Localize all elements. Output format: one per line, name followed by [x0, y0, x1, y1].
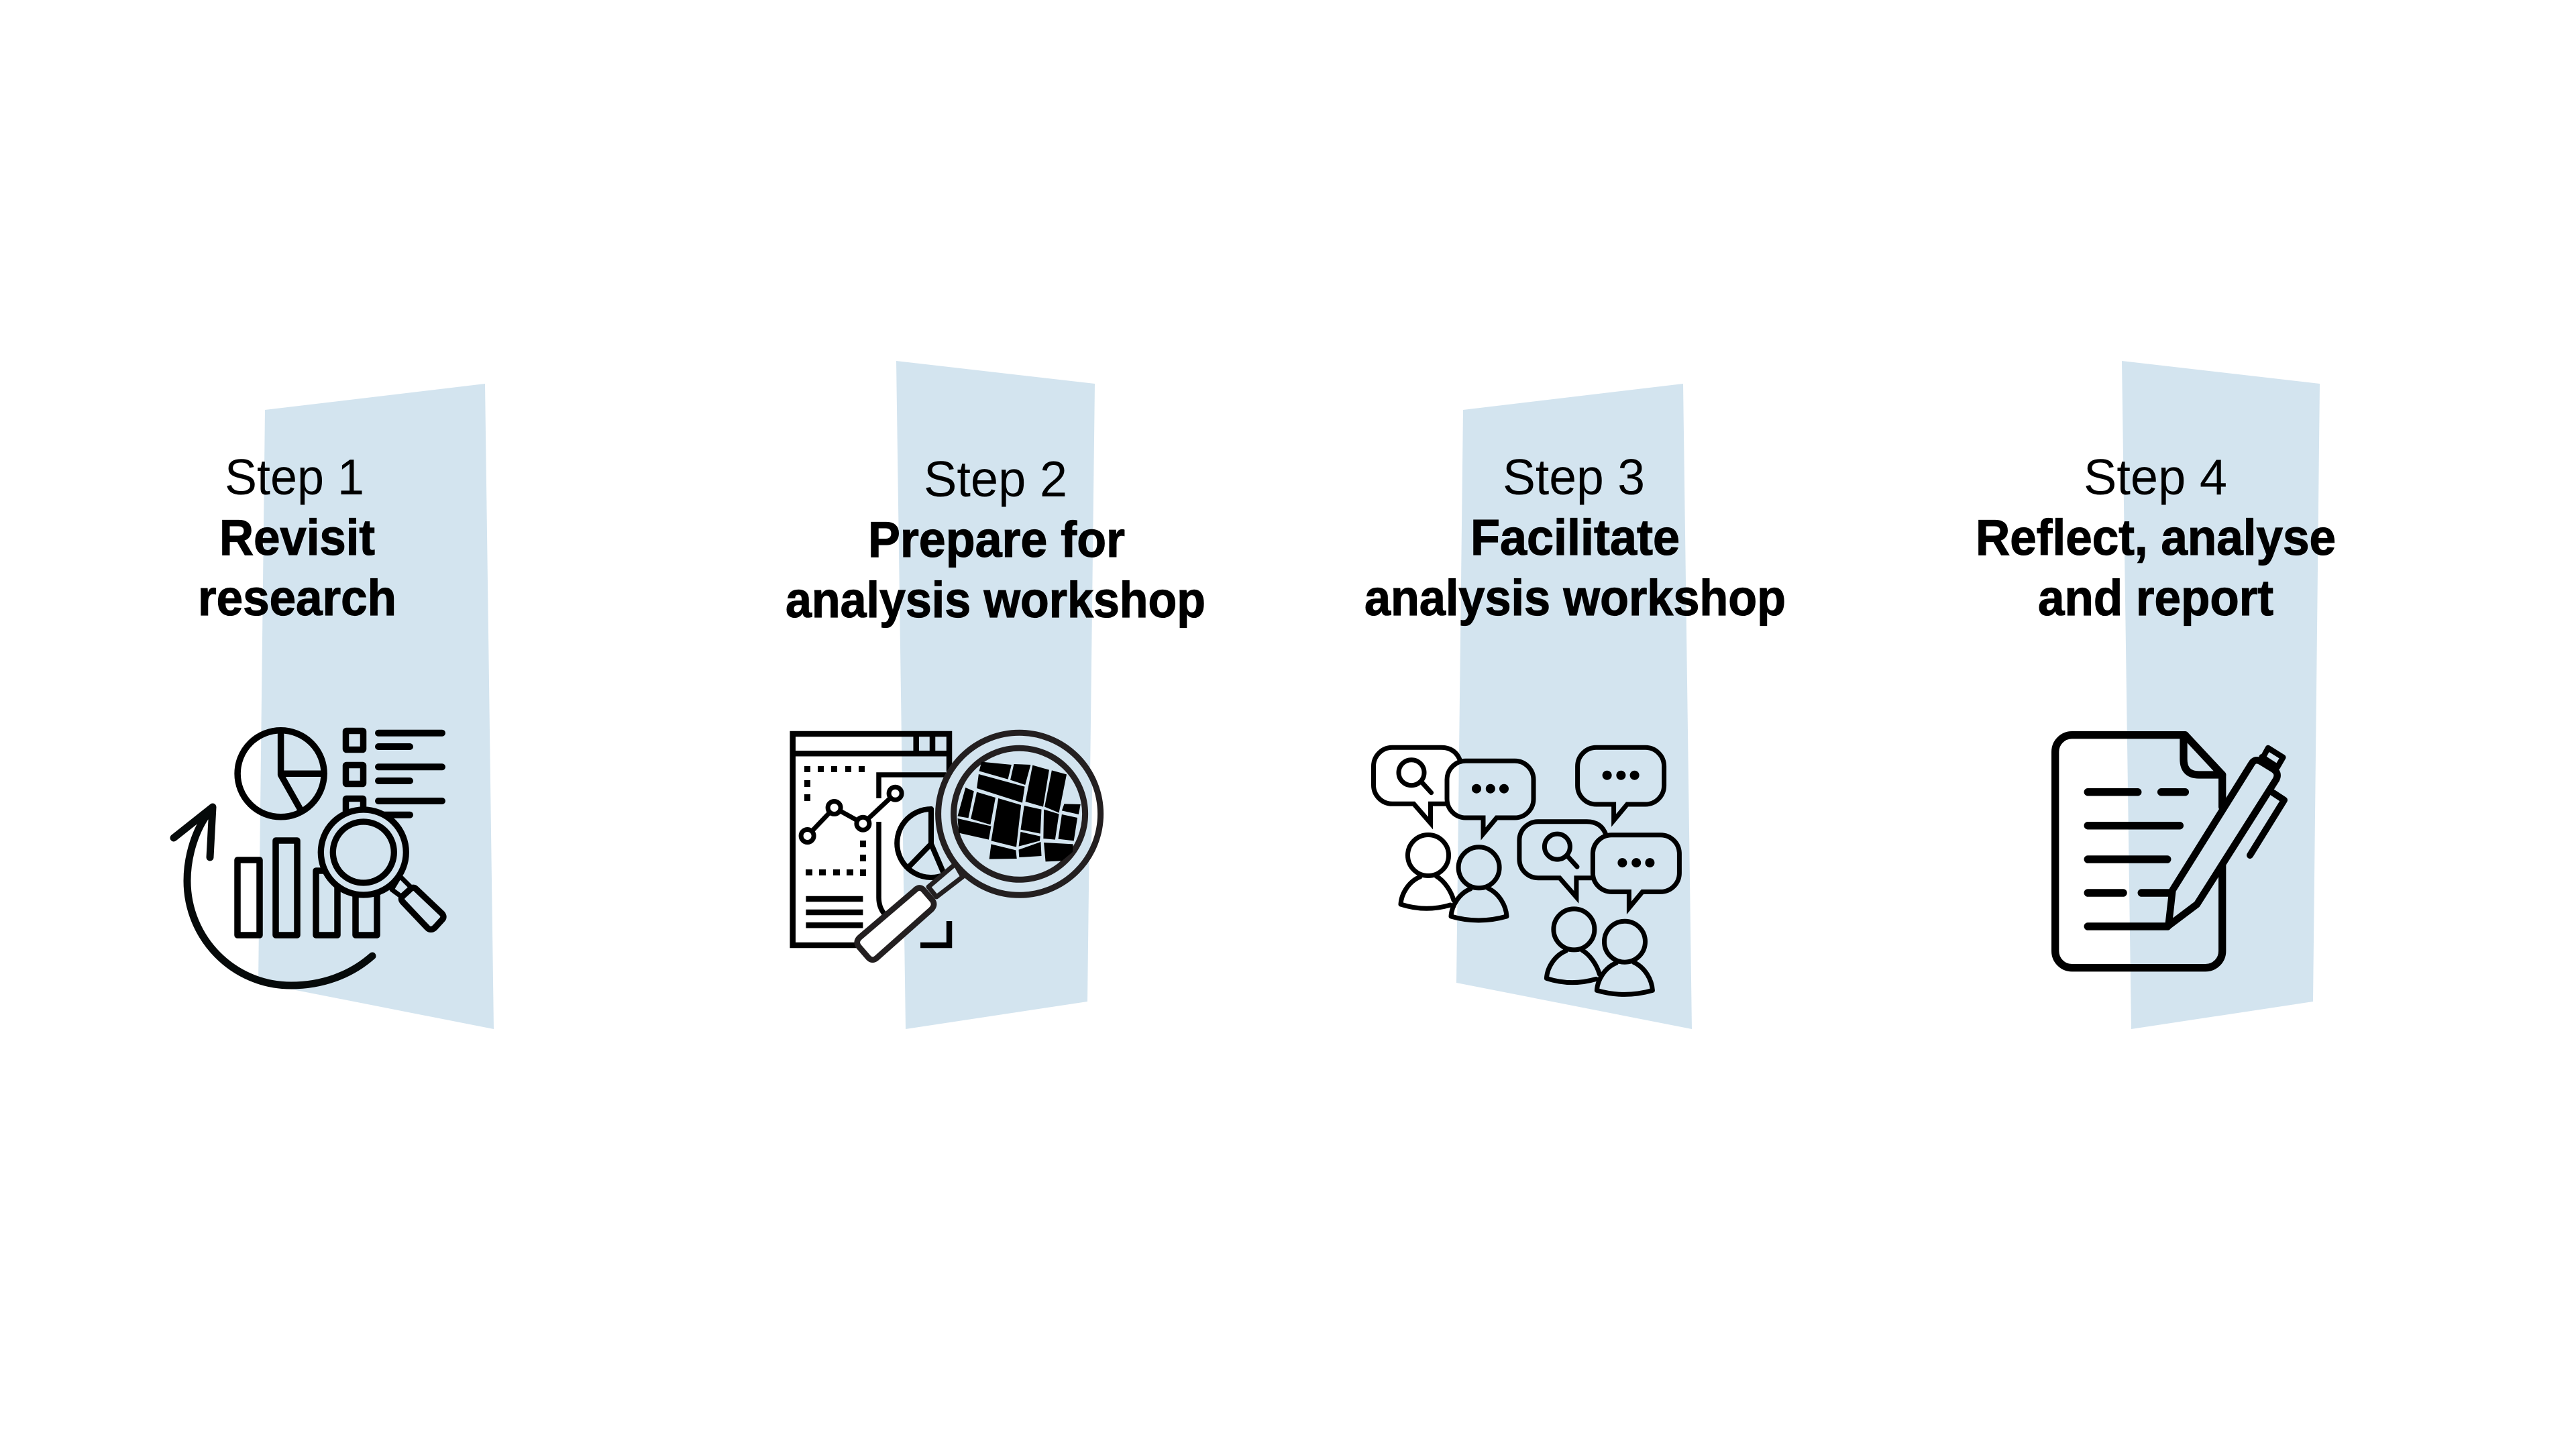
text block: step 1 [198, 449, 396, 626]
icon: discussion groups (step 3) [1373, 747, 1679, 994]
panel: step 2 background [896, 361, 1095, 1029]
icon: document and pen (step 4) [2055, 735, 2284, 968]
dots bubble [1447, 761, 1534, 834]
text block: step 1: Step 1 [225, 449, 364, 505]
text block: step 2 [786, 451, 1205, 628]
search bubble [1373, 747, 1460, 823]
text block: step 4: and report [2038, 570, 2273, 626]
text block: step 4: Step 4 [2084, 449, 2227, 505]
pen [2168, 748, 2284, 926]
text block: step 1: Revisit [219, 509, 375, 566]
panel: step 3 background [1456, 384, 1692, 1029]
pie chart [897, 809, 945, 877]
text block: step 2: Step 2 [924, 451, 1067, 507]
browser window frame [793, 734, 949, 945]
bar chart [237, 841, 377, 935]
person 2 [1458, 847, 1499, 888]
document [2055, 735, 2222, 968]
text block: step 3: Step 3 [1503, 449, 1645, 505]
dotted plot frame [804, 766, 866, 876]
text block: step 2: analysis workshop [786, 572, 1205, 628]
map blocks [957, 762, 1081, 861]
checklist [346, 731, 442, 817]
right group [1519, 822, 1679, 994]
text block: step 4 [1976, 449, 2336, 626]
pie chart [237, 731, 324, 817]
text block: step 3: analysis workshop [1364, 570, 1786, 626]
icon: research review (step 1) [174, 731, 443, 985]
line chart [801, 787, 902, 843]
panel: step 4 background [2122, 361, 2320, 1029]
left group [1373, 747, 1534, 920]
document lines [2088, 792, 2185, 926]
magnifier lens with map [935, 730, 1104, 898]
person 1 [1407, 835, 1449, 876]
panel: step 1 background [258, 384, 494, 1029]
text block: step 1: research [198, 570, 396, 626]
magnifier handle [857, 864, 963, 960]
circular arrow [174, 807, 372, 985]
upper right dots bubble [1578, 747, 1664, 820]
text block: step 2: Prepare for [868, 511, 1125, 568]
text block: step 3: Facilitate [1470, 509, 1680, 566]
magnifying glass [321, 810, 443, 930]
text block: step 4: Reflect, analyse [1976, 509, 2336, 566]
text block: step 3 [1364, 449, 1786, 626]
icon: dashboard under magnifier (step 2) [793, 698, 1101, 960]
